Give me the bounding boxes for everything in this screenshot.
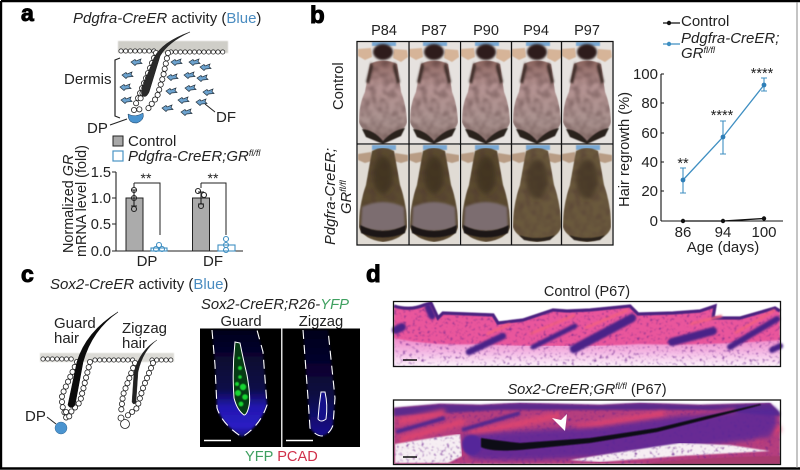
panel c [21,261,360,465]
hair follicle bulb [462,435,482,455]
dermis label: Dermis [64,71,112,88]
guard hair shaft [68,312,118,408]
bar chart legend: Control [128,133,176,150]
DF label: DF [216,109,236,126]
scale bars [204,440,313,442]
panel c title: Sox2-CreER activity (Blue) [50,276,228,293]
bar chart: GR mRNA level: DP [137,253,157,270]
DP label: DP [25,408,46,425]
DF label [205,104,236,126]
line chart: hair regrowth: 100 [751,224,777,241]
line chart legend: Pdgfra-CreER; [681,30,779,47]
line chart: hair regrowth: 20 [641,183,658,200]
line chart: hair regrowth: 60 [641,125,658,142]
panel b label: b [310,2,325,29]
panel a label: a [21,0,34,26]
dermal papilla [55,422,67,434]
line chart: hair regrowth: 40 [641,154,658,171]
channel legend: YFP PCAD [245,449,318,465]
dermis bracket [115,58,120,118]
mouse photo grid [357,41,613,245]
significance stars: ** [677,156,689,172]
micrograph column labels [220,314,343,330]
micrograph column labels: Zigzag [299,314,343,330]
timepoint labels: P90 [473,23,499,39]
bar chart: GR mRNA level: 0.5 [91,217,111,233]
dermal papilla [128,113,143,123]
panel a [21,0,261,270]
line chart: hair regrowth [617,66,783,256]
panel d label: d [366,261,381,288]
timepoint labels: P94 [523,23,549,39]
bar chart: GR mRNA level: 1.5 [91,165,111,181]
arrowhead [552,414,567,431]
bar chart: GR mRNA level: DF [203,253,223,270]
DP label [25,408,56,425]
panel b [310,2,783,256]
bar chart: GR mRNA level: mRNA level (fold) [74,145,90,257]
panel a title: Pdgfra-CreER activity (Blue) [73,10,261,27]
significance brackets [134,170,226,235]
DP label: DP [87,120,108,137]
line chart: hair regrowth: 100 [633,66,658,83]
guard hair label: hair [54,330,79,347]
micrograph title: Sox2-CreER;R26-YFP [201,297,349,313]
control section title: Control (P67) [544,284,630,300]
YFP-positive cells [233,342,250,415]
panel c label: c [21,261,34,287]
panel d [366,261,780,464]
control series [681,216,766,223]
DP label [87,119,127,137]
timepoint labels: P97 [574,23,600,39]
dermal fibroblast cells [120,59,214,116]
y axis title: Normalized GR [61,155,77,253]
bar chart: GR mRNA level: 1.0 [91,191,111,207]
line chart legend: GR [681,45,704,62]
timepoint labels [371,23,600,39]
control histology [394,302,780,366]
line chart: hair regrowth: 94 [715,224,731,241]
row label control: Control [331,62,347,110]
fluorescence micrograph [200,328,360,447]
line chart: hair regrowth: Age (days) [687,239,759,256]
mutant section title: fl/fl [615,381,628,391]
mutant histology [394,400,780,464]
row label mutant: Pdgfra-CreER; [323,148,339,245]
line chart: hair regrowth: Hair regrowth (%) [617,92,633,207]
guard and zigzag hair diagram [25,312,174,434]
line chart: hair regrowth: 86 [675,224,691,241]
hair follicle diagram [64,32,236,137]
significance brackets: ** [141,170,152,186]
line chart legend: fl/fl [704,45,716,55]
mutant series [680,78,767,193]
bar chart: GR mRNA level [61,145,243,270]
significance stars [677,66,774,172]
mutant section title: Sox2-CreER;GR [507,381,628,398]
micrograph column labels: Guard [220,314,262,330]
hair shaft [142,32,190,96]
timepoint labels: P84 [371,23,397,39]
bar chart legend [113,133,261,165]
panel b: fl/fl [338,179,348,192]
line chart: hair regrowth: 80 [641,95,658,112]
bars [126,188,235,252]
significance stars: **** [751,66,774,82]
zigzag hair label: hair [122,335,147,352]
guard hair label: Guard [54,315,96,332]
line chart legend [663,13,779,62]
zigzag hair shaft [132,340,157,404]
scale bar [403,359,417,361]
mutant section title: (P67) [627,382,667,398]
hair shaft [481,404,761,451]
timepoint labels: P87 [421,23,447,39]
panel b: GR [338,179,355,214]
bar chart legend: Pdgfra-CreER;GR [128,148,261,165]
line chart: hair regrowth: 0 [650,213,658,230]
zigzag hair label: Zigzag [122,320,167,337]
bar chart legend: fl/fl [249,148,261,158]
significance stars: **** [711,108,734,124]
line chart legend: Control [681,13,729,30]
bar chart: GR mRNA level: 0.0 [91,244,111,260]
scale bar [403,456,417,458]
significance brackets: ** [208,170,219,186]
